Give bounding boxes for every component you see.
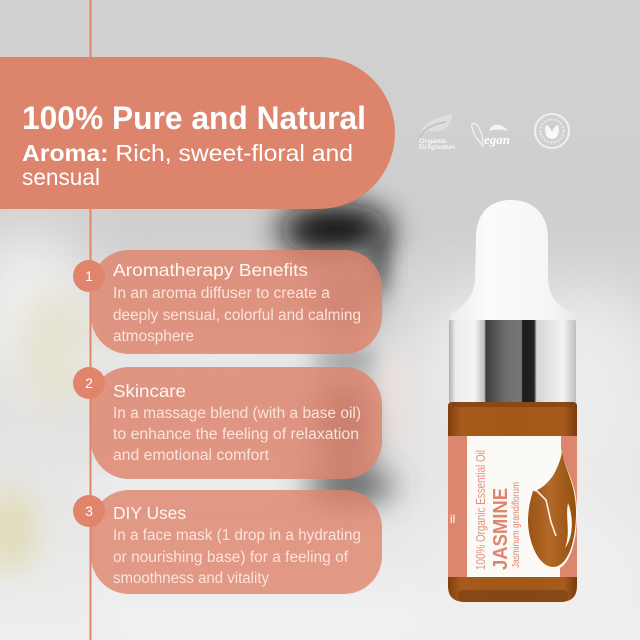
drop icon bbox=[548, 436, 577, 570]
bottle bbox=[448, 200, 577, 602]
heading: DIY Uses bbox=[113, 503, 186, 523]
body text bbox=[113, 285, 361, 345]
body text: and emotional comfort bbox=[113, 447, 270, 464]
number badge 1 bbox=[73, 260, 105, 292]
vertical timeline line bbox=[90, 0, 92, 640]
dropper bulb bbox=[450, 200, 575, 322]
amber glass bbox=[448, 402, 577, 602]
number badge 3 bbox=[73, 495, 105, 527]
body text bbox=[113, 405, 361, 464]
body text: or nourishing base) for a feeling of bbox=[113, 549, 349, 566]
number badge 2: 2 bbox=[85, 375, 93, 391]
label: JASMINE bbox=[490, 488, 512, 570]
icon: EU organic leaf: Organic bbox=[419, 138, 447, 145]
panel: aromatherapy benefits bbox=[73, 250, 382, 354]
body text: In an aroma diffuser to create a bbox=[113, 285, 330, 302]
icon: EU organic leaf: EU Agriculture bbox=[419, 144, 455, 151]
icon: no animal testing badge bbox=[535, 114, 569, 148]
body text: smoothness and vitality bbox=[113, 570, 269, 587]
subtitle continuation: sensual bbox=[22, 164, 100, 190]
panel: diy uses bbox=[73, 490, 382, 594]
icon: vegan badge bbox=[472, 123, 510, 147]
label bbox=[448, 436, 577, 577]
body text: deeply sensual, colorful and calming bbox=[113, 307, 361, 324]
icon: vegan badge: egan bbox=[484, 133, 510, 147]
subtitle: aroma: Aroma: Rich, sweet-floral and bbox=[22, 140, 353, 166]
body text: atmosphere bbox=[113, 328, 194, 345]
icon: EU organic leaf bbox=[419, 114, 455, 151]
body text: In a face mask (1 drop in a hydrating bbox=[113, 527, 361, 544]
panel: skincare bbox=[73, 367, 382, 479]
number badge 1: 1 bbox=[85, 268, 93, 284]
number badge 3: 3 bbox=[85, 503, 93, 519]
panel: header banner bbox=[0, 57, 395, 209]
title: 100% Pure and Natural bbox=[22, 100, 366, 136]
body text: In a massage blend (with a base oil) bbox=[113, 405, 361, 422]
label text: 100% Organic Essential Oil bbox=[474, 450, 488, 570]
body text bbox=[113, 527, 361, 587]
heading: Aromatherapy Benefits bbox=[113, 260, 308, 280]
silver cap bbox=[449, 320, 576, 403]
label: Jasminum grandiflorum bbox=[511, 482, 522, 568]
label: il bbox=[450, 512, 455, 526]
heading: Skincare bbox=[113, 381, 186, 401]
number badge 2 bbox=[73, 367, 105, 399]
body text: to enhance the feeling of relaxation bbox=[113, 426, 359, 443]
